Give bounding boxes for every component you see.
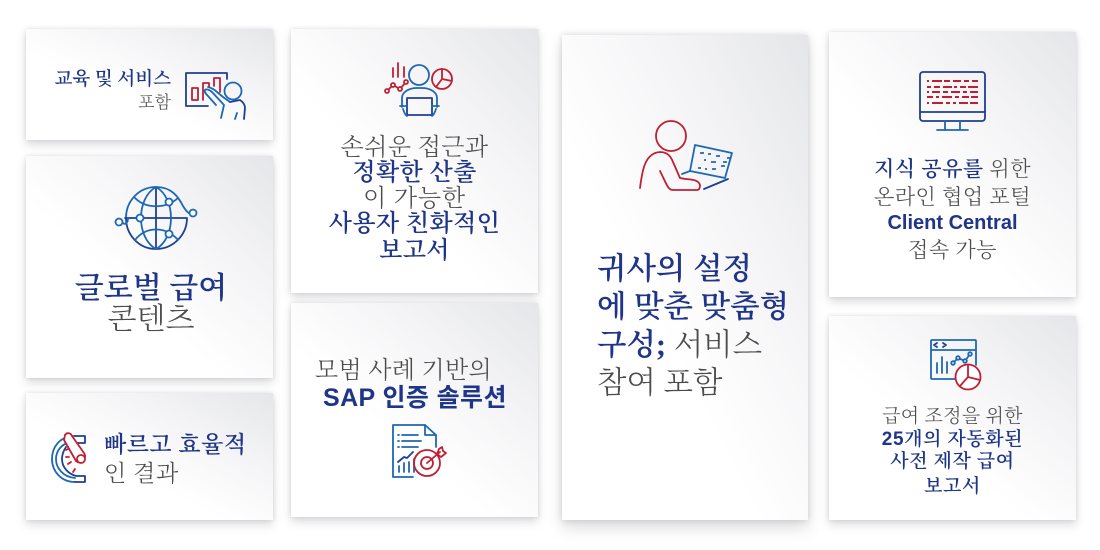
text: including engagement: 참여 포함 <box>597 366 722 400</box>
icon: globe network <box>114 186 198 250</box>
heading: education and services: 교육 및 서비스 <box>55 70 171 90</box>
panel: custom configuration <box>562 35 808 520</box>
icon: browser chart with pie <box>930 339 982 390</box>
heading: prebuilt payroll: 사전 제작 급여 <box>890 451 1015 472</box>
heading: SAP certified solution: SAP 인증 솔루션 <box>323 384 507 412</box>
text: easy access: 손쉬운 접근과 <box>341 135 488 161</box>
heading: user-friendly: 사용자 친화적인 <box>329 211 500 237</box>
text: online collaboration portal: 온라인 협업 포털 <box>874 185 1031 209</box>
panel: user-friendly reports <box>291 29 538 293</box>
panel: SAP certified solution <box>291 303 538 517</box>
text: included: 포함 <box>138 93 171 112</box>
icon: person at laptop <box>639 120 733 191</box>
text: access available: 접속 가능 <box>908 238 997 262</box>
text: configuration; services: 구성; 서비스 <box>597 328 762 362</box>
heading: 25 automated: 25개의 자동화된 <box>882 429 1023 450</box>
text: best-practice based: 모범 사례 기반의 <box>315 358 492 384</box>
icon: document with target <box>392 424 447 478</box>
heading: reports: 보고서 <box>379 238 450 264</box>
panel: client central portal <box>829 32 1076 297</box>
text: content: 콘텐츠 <box>108 303 194 336</box>
heading: reports: 보고서 <box>924 476 981 497</box>
text: enables: 이 가능한 <box>363 186 466 212</box>
icon: user with laptop and charts <box>384 62 453 117</box>
icon: monitor with data <box>919 71 986 131</box>
icon: speedometer <box>51 432 86 483</box>
icon: presenter at chart <box>185 72 246 120</box>
panel: fast and efficient results <box>26 393 273 520</box>
text: results: 인 결과 <box>104 461 179 486</box>
panel: prebuilt payroll reports <box>829 316 1076 520</box>
heading: accurate calculation: 정확한 산출 <box>352 160 477 186</box>
heading: global payroll: 글로벌 급여 <box>75 272 227 305</box>
panel: education and services <box>26 29 273 140</box>
text: payroll reconciliation: 급여 조정을 위한 <box>882 406 1023 427</box>
heading: tailored: 에 맞춘 맞춤형 <box>597 290 789 324</box>
heading: fast and efficient: 빠르고 효율적 <box>104 432 247 457</box>
text: knowledge sharing: 지식 공유를 위한 <box>874 157 1031 181</box>
heading: Client Central: Client Central <box>887 212 1018 234</box>
panel: global payroll content <box>26 156 273 378</box>
heading: customized to your settings: 귀사의 설정 <box>597 252 752 286</box>
